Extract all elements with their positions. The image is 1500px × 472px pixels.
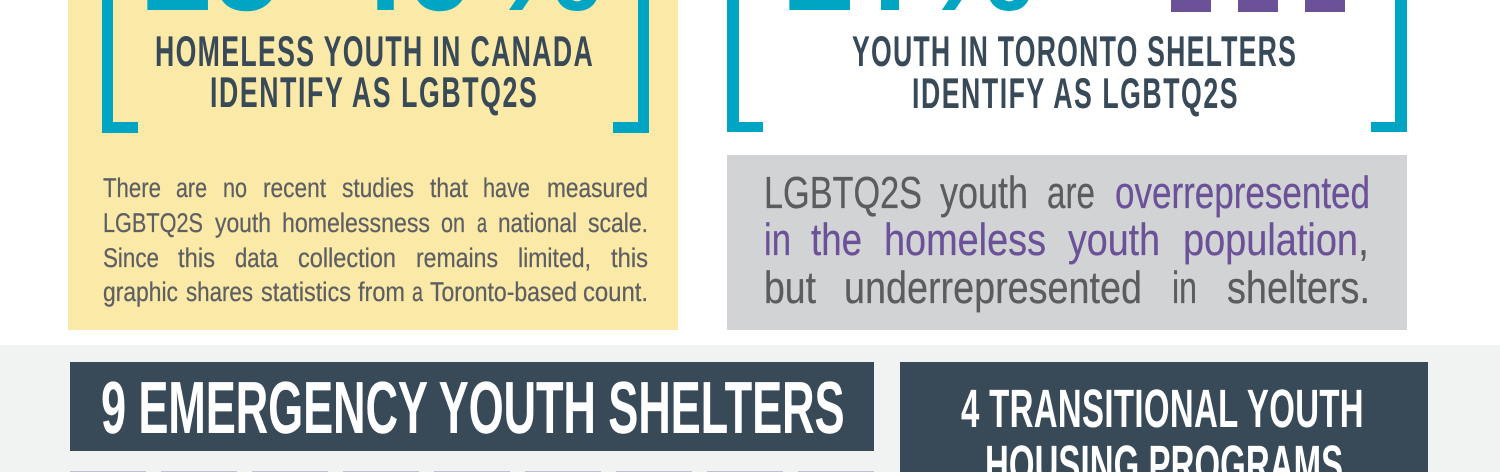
text block: callout copy: LGBTQ2S <box>764 167 922 218</box>
text block: national data note: youth <box>215 208 271 238</box>
text block: national data note: graphic <box>103 277 178 307</box>
banner: 4 transitional youth housing programs <box>900 362 1428 472</box>
text block: callout copy: youth <box>940 167 1028 218</box>
text block: callout copy: population <box>1183 214 1358 265</box>
text block: national data note: no <box>223 173 247 203</box>
text block: national data note: studies <box>342 173 414 203</box>
heading: youth in Toronto shelters: YOUTH IN TORONTO SHELTERS <box>852 28 1296 76</box>
text block: national data note: statistics <box>261 277 351 307</box>
text block: national data note: Toronto-based <box>430 277 577 307</box>
text block: national data note: data <box>235 243 279 273</box>
text block: national data note: LGBTQ2S <box>103 208 203 238</box>
heading: homeless youth in Canada <box>155 28 593 117</box>
text block: callout copy: in <box>1172 262 1197 313</box>
banner: 4 transitional youth housing programs: 4 TRANSITIONAL YOUTH <box>961 379 1364 439</box>
text block: national data note: a <box>412 277 424 307</box>
heading: homeless youth in Canada: HOMELESS YOUTH IN CANADA <box>155 28 593 76</box>
text block: national data note <box>103 173 648 307</box>
text block: callout copy: youth <box>1068 214 1160 265</box>
bracket frame <box>102 0 649 133</box>
text block: national data note: limited, <box>518 243 591 273</box>
text block: national data note: remains <box>416 243 498 273</box>
text block: national data note: recent <box>263 173 326 203</box>
text block: national data note: national <box>498 208 577 238</box>
text block: national data note: scale. <box>588 208 648 238</box>
heading: homeless youth in Canada: IDENTIFY AS LGBTQ2S <box>210 69 537 117</box>
text block: callout copy: homeless <box>884 214 1046 265</box>
icon: purple figures <box>1171 0 1345 12</box>
heading: youth in Toronto shelters: IDENTIFY AS LGBTQ2S <box>912 70 1238 118</box>
panel: Toronto statistic <box>727 0 1407 330</box>
text block: callout copy <box>764 167 1370 313</box>
text block: callout copy: in <box>764 214 791 265</box>
text block: national data note: from <box>358 277 405 307</box>
text block: callout copy: underrepresented <box>844 262 1142 313</box>
shelter tiles row <box>70 471 874 472</box>
heading: youth in Toronto shelters <box>852 28 1296 118</box>
text block: callout copy: overrepresented <box>1115 167 1370 218</box>
text block: national data note: are <box>176 173 207 203</box>
text block: callout copy: shelters. <box>1227 262 1370 313</box>
text block: callout copy: , <box>1358 214 1369 265</box>
banner: 9 emergency youth shelters: 9 EMERGENCY YOUTH SHELTERS <box>101 366 845 449</box>
panel: Canada statistic <box>68 0 678 330</box>
text block: national data note: on <box>441 208 465 238</box>
text block: national data note: shares <box>186 277 253 307</box>
text block: national data note: count. <box>583 277 648 307</box>
text block: national data note: Since <box>103 243 159 273</box>
big number: 21% <box>789 0 1028 11</box>
text block: national data note: a <box>477 208 488 238</box>
callout: overrepresented <box>727 155 1407 330</box>
text block: national data note: this <box>178 243 215 273</box>
panel: housing programs band <box>0 345 1500 472</box>
big number: 25-40% <box>143 0 603 37</box>
text block: callout copy: the <box>811 214 862 265</box>
text block: national data note: measured <box>547 173 648 203</box>
bracket frame <box>727 0 1407 132</box>
text block: callout copy: are <box>1047 167 1095 218</box>
text block: national data note: collection <box>298 243 396 273</box>
text block: national data note: have <box>483 173 530 203</box>
text block: national data note: that <box>430 173 468 203</box>
text block: national data note: There <box>103 173 161 203</box>
text block: national data note: this <box>611 243 648 273</box>
text block: national data note: homelessness <box>282 208 430 238</box>
text block: callout copy: but <box>764 262 816 313</box>
